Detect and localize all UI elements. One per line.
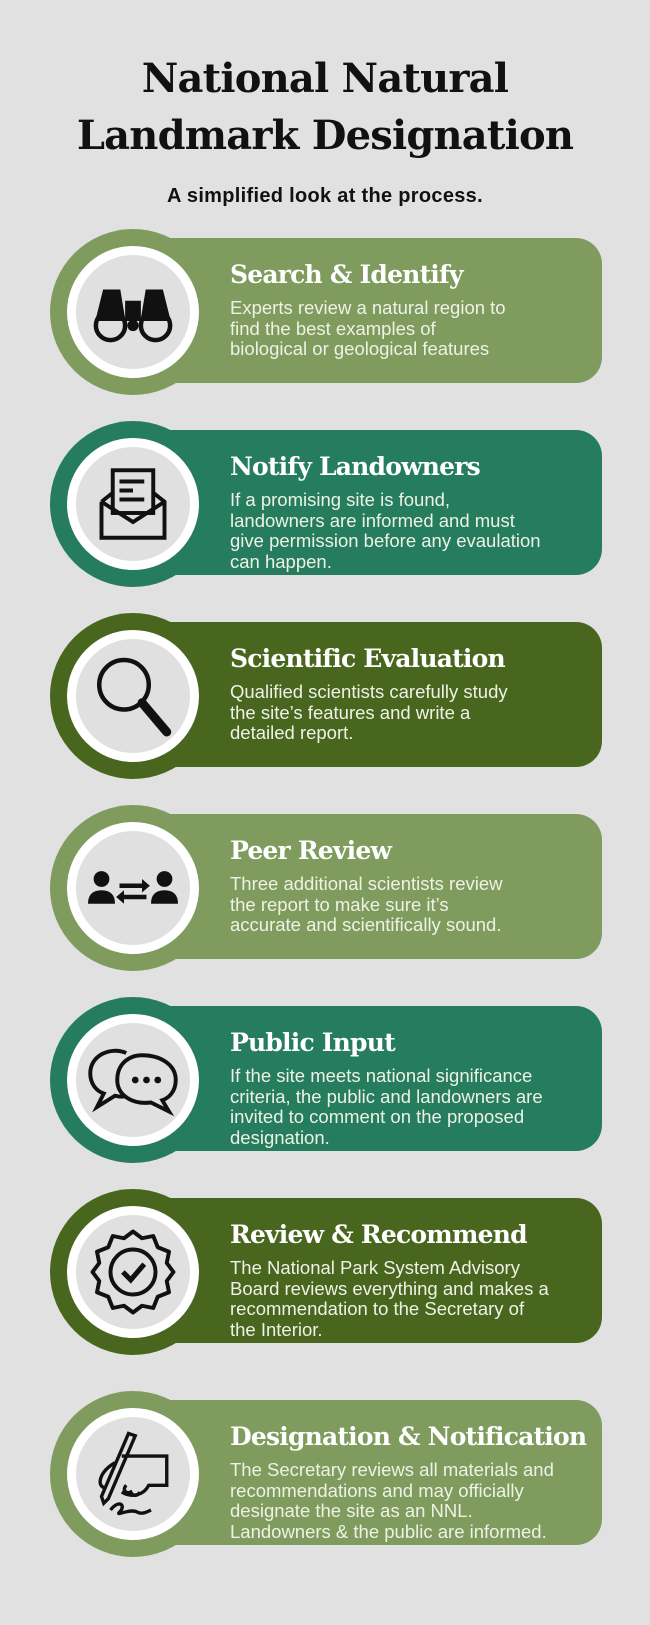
panel: review & recommend: The National Park System Advisory [230, 1257, 520, 1278]
panel: scientific evaluation: Qualified scientists carefully study [230, 681, 508, 702]
panel: public input: invited to comment on the proposed [230, 1106, 524, 1127]
icon: speech bubbles [76, 1023, 190, 1137]
panel: public input: criteria, the public and landowners are [230, 1086, 543, 1107]
panel: search & identify: Search & Identify [230, 260, 463, 289]
panel: public input: designation. [230, 1127, 330, 1148]
panel: peer review: Three additional scientists review [230, 873, 502, 894]
icon: badge check [76, 1215, 190, 1329]
panel: notify landowners: landowners are informed and must [230, 510, 515, 531]
icon: envelope [76, 447, 190, 561]
title: Landmark Designation [77, 112, 573, 159]
panel: scientific evaluation [50, 613, 602, 779]
panel: review & recommend [50, 1189, 602, 1355]
panel: scientific evaluation: the site’s features and write a [230, 702, 470, 723]
panel: public input: If the site meets national significance [230, 1065, 532, 1086]
icon: magnifier [76, 639, 190, 753]
panel: review & recommend: recommendation to the Secretary of [230, 1298, 524, 1319]
subtitle: A simplified look at the process. [167, 185, 483, 207]
panel: search & identify: Experts review a natural region to [230, 297, 506, 318]
panel: notify landowners: Notify Landowners [230, 452, 480, 481]
panel: designation & notification [50, 1391, 602, 1557]
panel: designation & notification: recommendations and may officially [230, 1480, 524, 1501]
panel: notify landowners: give permission before any evaulation [230, 530, 541, 551]
panel: designation & notification: designate the site as an NNL. [230, 1500, 473, 1521]
panel: search & identify [50, 229, 602, 395]
panel: notify landowners: If a promising site is found, [230, 489, 450, 510]
panel: public input: Public Input [230, 1028, 395, 1057]
panel: search & identify: biological or geological features [230, 338, 489, 359]
icon: binoculars [76, 255, 190, 369]
panel: peer review: Peer Review [230, 836, 391, 865]
icon: people exchange [76, 831, 190, 945]
title [77, 55, 574, 159]
title: National Natural [142, 55, 508, 102]
panel: peer review: accurate and scientifically sound. [230, 914, 501, 935]
panel: scientific evaluation: Scientific Evaluation [230, 644, 505, 673]
icon: hand signing [76, 1417, 190, 1531]
panel: designation & notification: Designation & Notification [230, 1422, 586, 1451]
panel: public input [50, 997, 602, 1163]
panel: review & recommend: Board reviews everything and makes a [230, 1278, 549, 1299]
panel: scientific evaluation: detailed report. [230, 722, 353, 743]
panel: peer review: the report to make sure it’s [230, 894, 449, 915]
panel: search & identify: find the best examples of [230, 318, 436, 339]
panel: notify landowners [50, 421, 602, 587]
panel: review & recommend: Review & Recommend [230, 1220, 527, 1249]
panel: designation & notification: Landowners & the public are informed. [230, 1521, 547, 1542]
panel: notify landowners: can happen. [230, 551, 332, 572]
panel: review & recommend: the Interior. [230, 1319, 323, 1340]
panel: designation & notification: The Secretary reviews all materials and [230, 1459, 554, 1480]
panel: peer review [50, 805, 602, 971]
